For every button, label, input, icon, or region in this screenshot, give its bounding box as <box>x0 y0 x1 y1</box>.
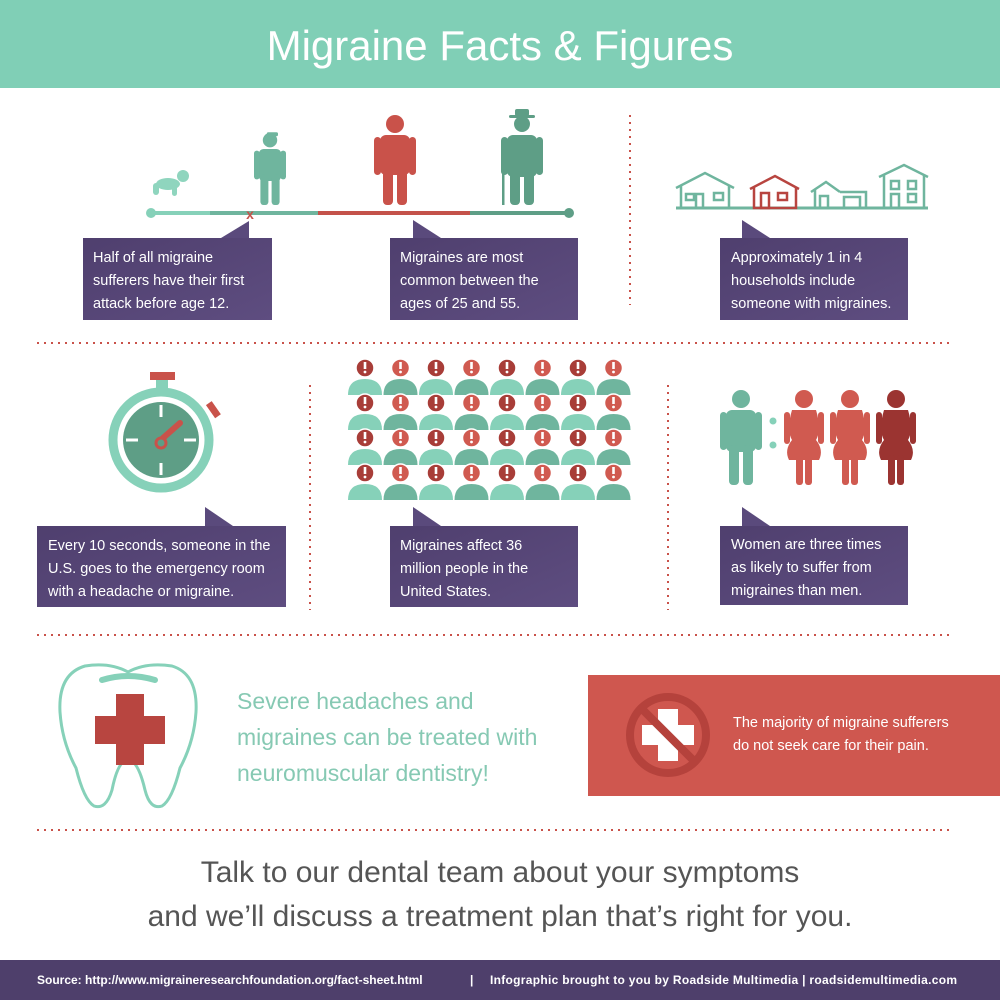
callout: households: Approximately 1 in 4 <box>731 250 862 266</box>
callout: 36 million <box>390 507 578 607</box>
panel: no care: The majority of migraine sufferers <box>733 715 949 731</box>
icon: no cross <box>630 697 706 773</box>
callout: first attack: sufferers have their first <box>93 273 244 289</box>
callout: emergency room: with a headache or migraine. <box>47 584 234 600</box>
footer <box>0 960 1000 1000</box>
closing message: and we’ll discuss a treatment plan that’s right for you. <box>148 900 852 933</box>
text: dentistry: neuromuscular dentistry! <box>237 760 489 786</box>
callout: women: as likely to suffer from <box>731 560 872 576</box>
icon: stopwatch <box>113 372 221 488</box>
callout: 36 million: Migraines affect 36 <box>400 538 522 554</box>
callout: households: someone with migraines. <box>731 296 891 312</box>
callout: women: migraines than men. <box>731 583 862 599</box>
callout: first attack: attack before age 12. <box>93 296 229 312</box>
callout: women <box>720 507 908 605</box>
timeline: x <box>246 206 254 222</box>
icon: old man <box>501 109 543 205</box>
footer: Infographic brought to you by Roadside Multimedia | roadsidemultimedia.com <box>490 973 957 987</box>
callout: first attack <box>83 221 272 320</box>
panel: no care <box>588 675 1000 796</box>
callout: emergency room <box>37 507 286 607</box>
footer: | <box>470 973 473 987</box>
icon: baby <box>153 170 189 196</box>
callout: ages <box>390 220 578 320</box>
footer: Source: http://www.migraineresearchfoundation.org/fact-sheet.html <box>37 973 423 987</box>
callout: 36 million: million people in the <box>400 561 528 577</box>
icon: houses <box>676 165 928 208</box>
timeline <box>146 206 574 222</box>
icon: man vs three women <box>720 390 916 485</box>
icon: adult man <box>374 115 416 205</box>
text: dentistry: migraines can be treated with <box>237 724 537 750</box>
callout: ages: ages of 25 and 55. <box>400 296 520 312</box>
callout: ages: common between the <box>400 273 539 289</box>
callout: emergency room: U.S. goes to the emergency room <box>48 561 265 577</box>
callout: first attack: Half of all migraine <box>93 250 213 266</box>
callout: emergency room: Every 10 seconds, someone in the <box>48 538 270 554</box>
title: Migraine Facts & Figures <box>267 22 733 69</box>
icon: child <box>254 132 286 205</box>
panel: no care: do not seek care for their pain. <box>733 738 929 754</box>
text: dentistry: Severe headaches and <box>237 688 474 714</box>
header band <box>0 0 1000 88</box>
callout: households: households include <box>731 273 855 289</box>
callout: 36 million: United States. <box>400 584 491 600</box>
callout: households <box>720 220 908 320</box>
closing message: Talk to our dental team about your symptoms <box>201 856 799 889</box>
callout: ages: Migraines are most <box>400 250 523 266</box>
callout: women: Women are three times <box>731 537 881 553</box>
icon grid: 32 people <box>348 359 630 500</box>
icon: tooth with cross <box>60 665 196 807</box>
